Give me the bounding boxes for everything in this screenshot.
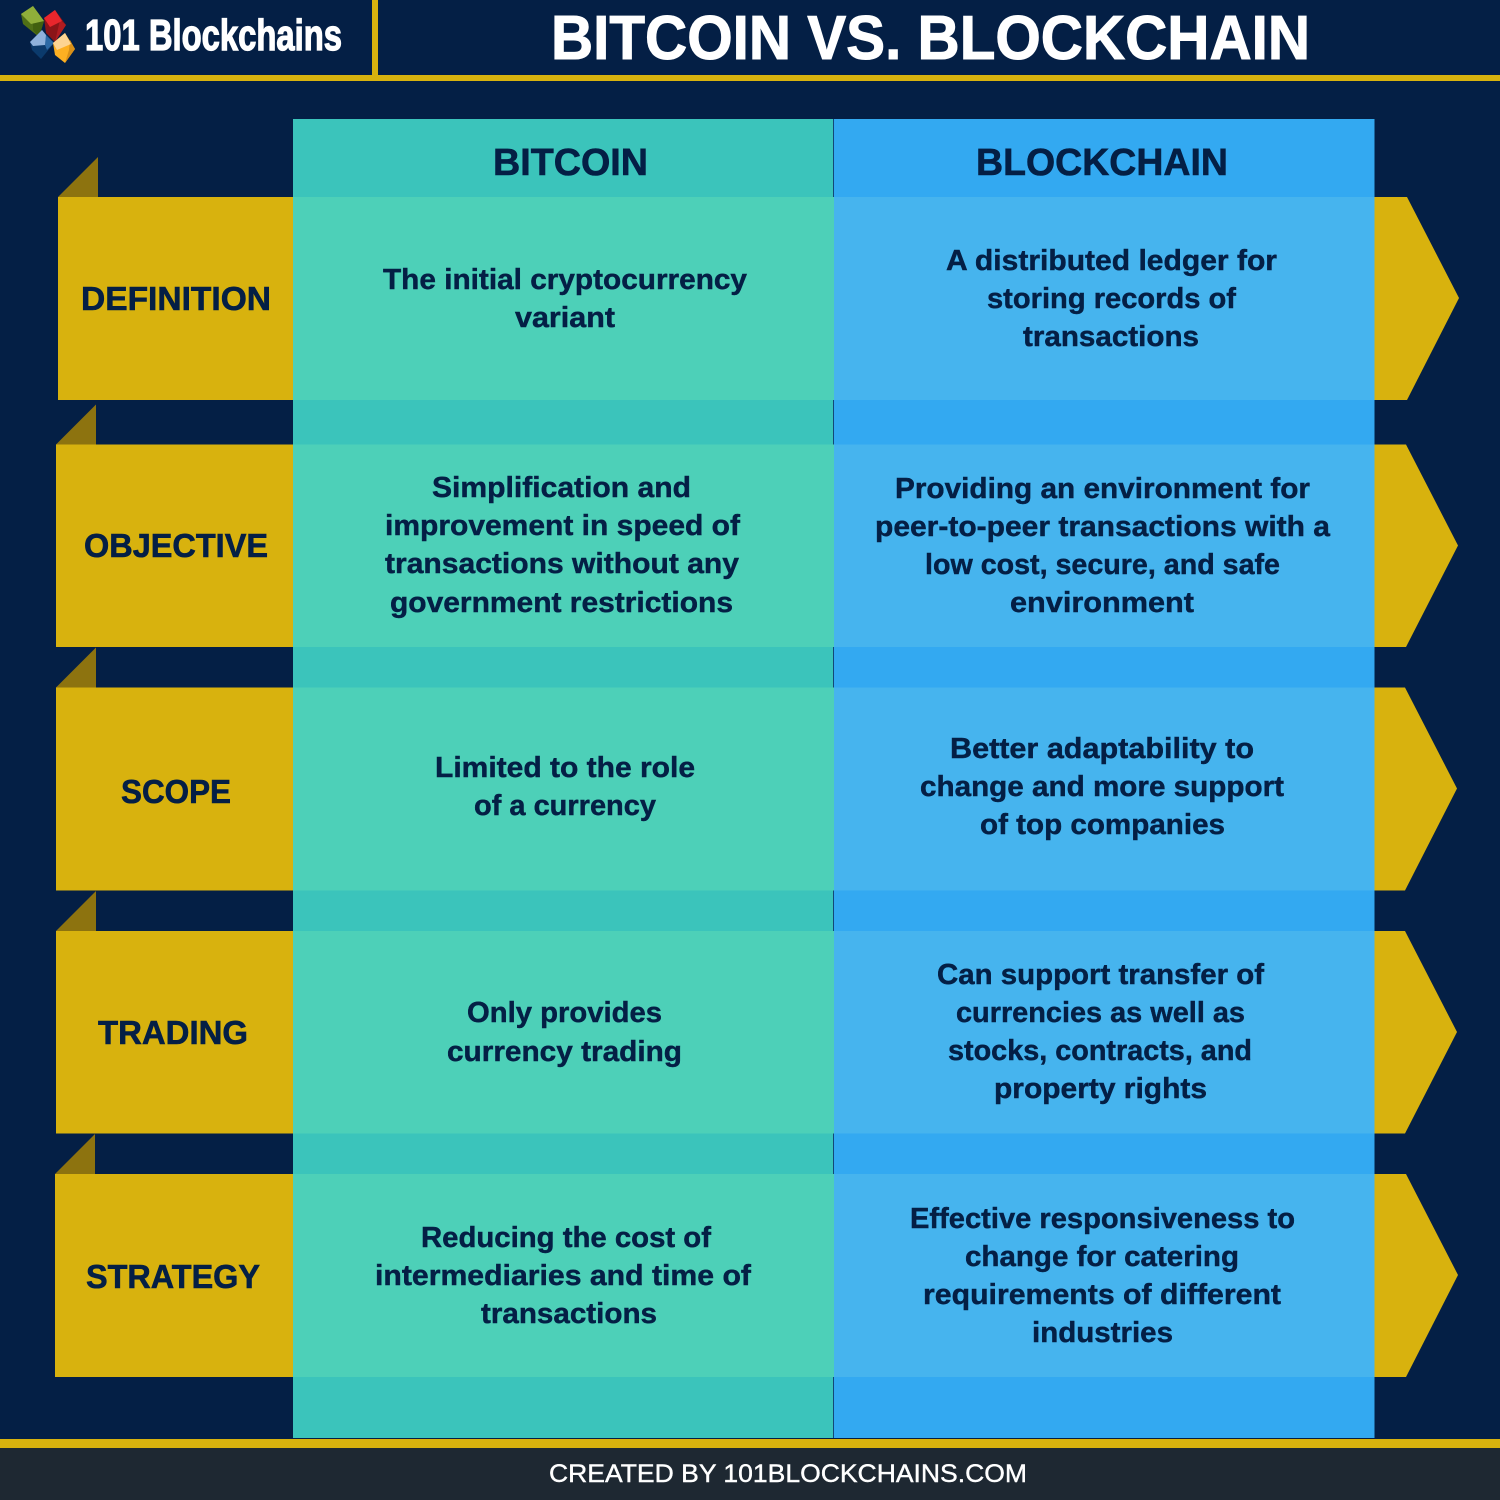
row: strategy bbox=[55, 1134, 1458, 1377]
row: objective bbox=[56, 404, 1458, 647]
cell: blockchain scope: of top companies bbox=[980, 809, 1225, 841]
cell: bitcoin scope: of a currency bbox=[474, 790, 656, 822]
cell: blockchain objective: Providing an environment for bbox=[895, 473, 1310, 505]
ribbon: strategy bbox=[55, 1134, 1458, 1377]
cell: blockchain objective: environment bbox=[1010, 587, 1194, 619]
cell: blockchain objective: low cost, secure, and safe bbox=[925, 549, 1280, 581]
cell: blockchain trading: property rights bbox=[994, 1073, 1207, 1105]
cell: blockchain strategy bbox=[834, 1174, 1374, 1377]
label: strategy: STRATEGY bbox=[86, 1258, 260, 1295]
cell: bitcoin strategy bbox=[293, 1174, 834, 1377]
footer credit: CREATED BY 101BLOCKCHAINS.COM bbox=[549, 1460, 1027, 1488]
cell: blockchain scope bbox=[834, 688, 1374, 890]
ribbon: objective bbox=[56, 404, 1458, 647]
ribbon: definition bbox=[58, 157, 1459, 400]
cell: blockchain strategy: industries bbox=[1032, 1317, 1173, 1349]
cell: blockchain definition bbox=[834, 197, 1374, 400]
heading: bitcoin: BITCOIN bbox=[493, 142, 648, 184]
logo bbox=[21, 6, 342, 63]
row: scope bbox=[56, 648, 1457, 890]
cell: bitcoin objective: transactions without any bbox=[385, 548, 739, 580]
cell: bitcoin objective bbox=[293, 444, 834, 647]
cell: blockchain trading: stocks, contracts, and bbox=[948, 1035, 1252, 1067]
cell: bitcoin trading: currency trading bbox=[447, 1036, 682, 1068]
footer bbox=[0, 1439, 1500, 1500]
icon: coloured cubes bbox=[21, 6, 75, 63]
cell: blockchain strategy: change for catering bbox=[965, 1241, 1239, 1273]
logo wordmark: 101 Blockchains bbox=[85, 11, 342, 60]
label: definition: DEFINITION bbox=[81, 280, 271, 317]
cell: bitcoin scope: Limited to the role bbox=[435, 752, 695, 784]
cell: bitcoin strategy: transactions bbox=[481, 1298, 657, 1330]
cell: blockchain objective: peer-to-peer transactions with a bbox=[875, 511, 1331, 543]
heading: blockchain: BLOCKCHAIN bbox=[976, 142, 1228, 184]
cell: blockchain trading: Can support transfer of bbox=[937, 959, 1264, 991]
cell: bitcoin definition: The initial cryptocurrency bbox=[383, 264, 747, 296]
row: definition bbox=[58, 157, 1459, 400]
header bar bbox=[0, 0, 1500, 81]
cell: blockchain trading bbox=[834, 931, 1374, 1134]
cell: blockchain scope: Better adaptability to bbox=[950, 733, 1254, 765]
row: trading bbox=[56, 891, 1457, 1134]
cell: bitcoin strategy: intermediaries and time of bbox=[375, 1260, 751, 1292]
cell: bitcoin objective: government restrictions bbox=[390, 587, 733, 619]
cell: bitcoin definition: variant bbox=[515, 302, 615, 334]
ribbon: scope bbox=[56, 648, 1457, 890]
cell: blockchain scope: change and more support bbox=[920, 771, 1284, 803]
cell: blockchain definition: storing records of bbox=[987, 283, 1236, 315]
cell: bitcoin trading: Only provides bbox=[467, 997, 662, 1029]
cell: blockchain definition: A distributed ledger for bbox=[946, 245, 1277, 277]
cell: bitcoin strategy: Reducing the cost of bbox=[421, 1222, 711, 1254]
title: BITCOIN VS. BLOCKCHAIN bbox=[551, 4, 1310, 73]
ribbon: trading bbox=[56, 891, 1457, 1134]
label: scope: SCOPE bbox=[121, 773, 231, 810]
cell: blockchain trading: currencies as well as bbox=[956, 997, 1245, 1029]
label: trading: TRADING bbox=[98, 1014, 248, 1051]
cell: blockchain objective bbox=[834, 444, 1374, 647]
cell: bitcoin objective: Simplification and bbox=[432, 472, 691, 504]
cell: blockchain definition: transactions bbox=[1023, 321, 1199, 353]
cell: blockchain strategy: Effective responsiveness to bbox=[910, 1203, 1295, 1235]
label: objective: OBJECTIVE bbox=[84, 527, 268, 564]
cell: blockchain strategy: requirements of different bbox=[923, 1279, 1281, 1311]
cell: bitcoin objective: improvement in speed of bbox=[385, 510, 740, 542]
cell: bitcoin trading bbox=[293, 931, 834, 1134]
cell: bitcoin scope bbox=[293, 688, 834, 890]
cell: bitcoin definition bbox=[293, 197, 834, 400]
